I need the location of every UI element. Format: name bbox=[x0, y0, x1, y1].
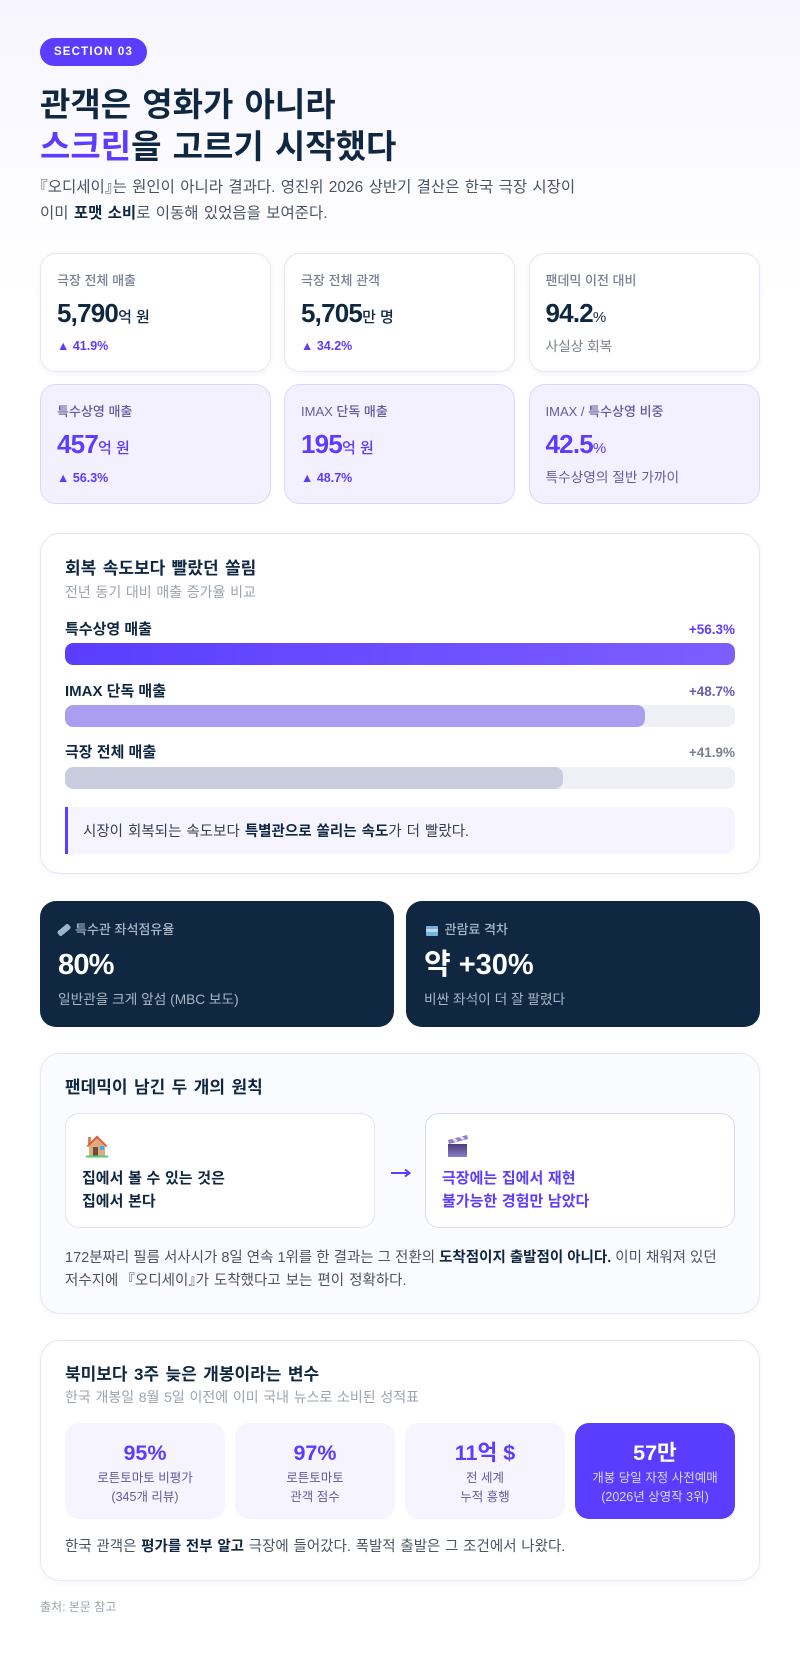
panel heading: 팬데믹이 남긴 두 개의 원칙 bbox=[65, 1078, 263, 1097]
stat card: total audience: ▲ 34.2% bbox=[301, 339, 352, 353]
principle box: home bbox=[65, 1113, 375, 1228]
tile: presales bbox=[575, 1423, 735, 1519]
tile: audience score: 로튼토마토 bbox=[286, 1471, 344, 1485]
panel subheading: 전년 동기 대비 매출 증가율 비교 bbox=[65, 584, 256, 600]
source note: 출처: 본문 참고 bbox=[40, 1600, 116, 1614]
principle text: 불가능한 경험만 남았다 bbox=[442, 1193, 589, 1210]
paragraph: 저수지에 『오디세이』가 도착했다고 보는 편이 정확하다. bbox=[65, 1273, 407, 1289]
panel heading: 회복 속도보다 빨랐던 쏠림 bbox=[65, 559, 256, 578]
stat card: total audience: 극장 전체 관객 bbox=[301, 273, 380, 288]
tile: critics score: 로튼토마토 비평가 bbox=[97, 1471, 193, 1485]
subtitle: 『오디세이』는 원인이 아니라 결과다. 영진위 2026 상반기 결산은 한국 극장 시장이 bbox=[32, 179, 575, 196]
paragraph: 172분짜리 필름 서사시가 8일 연속 1위를 한 결과는 그 전환의 도착점이지 출발점이 아니다. 이미 채워져 있던 bbox=[65, 1250, 717, 1266]
value: 80% bbox=[58, 949, 114, 981]
principle box: theater bbox=[425, 1113, 735, 1228]
tile: presales: (2026년 상영작 3위) bbox=[601, 1490, 709, 1504]
stat card: special format revenue: 457억 원 bbox=[57, 429, 130, 459]
title: 관객은 영화가 아니라 bbox=[40, 86, 336, 123]
tile: critics score: 95% bbox=[123, 1441, 167, 1465]
icon: house bbox=[86, 1136, 108, 1158]
stat card: IMAX share: 42.5% bbox=[546, 429, 606, 459]
bar label: total: 극장 전체 매출 bbox=[65, 744, 156, 761]
stat card: special format revenue bbox=[40, 384, 271, 504]
subtitle: 이미 포맷 소비로 이동해 있었음을 보여준다. bbox=[40, 205, 328, 222]
tile: presales: 개봉 당일 자정 사전예매 bbox=[592, 1471, 718, 1485]
stat card: special format revenue: ▲ 56.3% bbox=[57, 471, 108, 485]
stat card: total revenue: ▲ 41.9% bbox=[57, 339, 108, 353]
dark card: ticket price gap bbox=[406, 901, 760, 1027]
note: 일반관을 크게 앞섬 (MBC 보도) bbox=[58, 992, 239, 1007]
stat card: IMAX revenue bbox=[284, 384, 515, 504]
panel heading: 북미보다 3주 늦은 개봉이라는 변수 bbox=[65, 1365, 319, 1384]
tile: worldwide gross: 전 세계 bbox=[466, 1471, 504, 1485]
stat card: total revenue: 5,790억 원 bbox=[57, 298, 150, 328]
icon: credit card bbox=[426, 926, 438, 936]
subtitle bbox=[32, 179, 575, 222]
badge: section 03 bbox=[40, 38, 147, 66]
stat card: IMAX revenue: ▲ 48.7% bbox=[301, 471, 352, 485]
stat card: IMAX share: IMAX / 특수상영 비중 bbox=[546, 404, 664, 419]
value: 약 +30% bbox=[424, 949, 534, 981]
stat card: IMAX share bbox=[528, 384, 760, 504]
stat card: versus pre-pandemic: 팬데믹 이전 대비 bbox=[546, 273, 636, 288]
stat card: IMAX revenue: 195억 원 bbox=[301, 429, 374, 459]
stat card: total revenue: 극장 전체 매출 bbox=[57, 273, 136, 288]
icon: clapperboard bbox=[448, 1135, 468, 1157]
stat card: special format revenue: 특수상영 매출 bbox=[57, 404, 132, 419]
note: 비싼 좌석이 더 잘 팔렸다 bbox=[424, 992, 565, 1007]
tile: critics score bbox=[65, 1423, 225, 1519]
bar value: special format: +56.3% bbox=[689, 622, 735, 637]
principle text bbox=[442, 1170, 589, 1210]
stat card: total revenue bbox=[40, 253, 271, 372]
panel: delayed release bbox=[40, 1340, 760, 1581]
callout: 시장이 회복되는 속도보다 특별관으로 쏠리는 속도가 더 빨랐다. bbox=[83, 824, 469, 840]
title: 스크린을 고르기 시작했다 bbox=[40, 128, 396, 165]
title bbox=[40, 86, 396, 165]
dark card: seat occupancy bbox=[40, 901, 394, 1027]
bar label: special format: 특수상영 매출 bbox=[65, 621, 152, 638]
panel subheading: 한국 개봉일 8월 5일 이전에 이미 국내 뉴스로 소비된 성적표 bbox=[65, 1389, 419, 1405]
tile: worldwide gross: 11억 $ bbox=[455, 1441, 515, 1465]
icon: ticket bbox=[57, 924, 71, 936]
stat card: versus pre-pandemic bbox=[528, 253, 760, 372]
bar: total bbox=[65, 767, 735, 789]
principle text bbox=[82, 1170, 225, 1210]
stat card: versus pre-pandemic: 94.2% bbox=[546, 298, 606, 328]
stat card: IMAX revenue: IMAX 단독 매출 bbox=[301, 404, 388, 419]
conclusion text: 한국 관객은 평가를 전부 알고 극장에 들어갔다. 폭발적 출발은 그 조건에서 나왔다. bbox=[65, 1539, 565, 1555]
callout bbox=[65, 807, 735, 854]
principle text: 극장에는 집에서 재현 bbox=[442, 1170, 576, 1187]
bar: special format bbox=[65, 643, 735, 665]
bar: IMAX bbox=[65, 705, 735, 727]
bar label: IMAX: IMAX 단독 매출 bbox=[65, 683, 166, 700]
principle text: 집에서 볼 수 있는 것은 bbox=[82, 1170, 225, 1187]
tile: audience score: 관객 점수 bbox=[290, 1490, 340, 1504]
bar value: total: +41.9% bbox=[689, 745, 735, 760]
stat card: total audience: 5,705만 명 bbox=[301, 298, 394, 328]
principle text: 집에서 본다 bbox=[82, 1193, 156, 1210]
tile: worldwide gross: 누적 흥행 bbox=[460, 1490, 510, 1504]
stat card: total audience bbox=[284, 253, 515, 372]
badge: section 03: SECTION 03 bbox=[54, 46, 133, 58]
stat card: versus pre-pandemic: 사실상 회복 bbox=[546, 339, 612, 354]
tile: audience score: 97% bbox=[293, 1441, 337, 1465]
stat card: IMAX share: 특수상영의 절반 가까이 bbox=[546, 470, 679, 485]
panel: two principles bbox=[40, 1053, 760, 1314]
tile: presales: 57만 bbox=[633, 1441, 677, 1465]
bar value: IMAX: +48.7% bbox=[689, 684, 735, 699]
arrow bbox=[391, 1168, 411, 1178]
label: 특수관 좌석점유율 bbox=[75, 922, 174, 937]
panel: bar chart comparison bbox=[40, 533, 760, 874]
tile: worldwide gross bbox=[405, 1423, 565, 1519]
label: 관람료 격차 bbox=[444, 922, 508, 937]
tile: critics score: (345개 리뷰) bbox=[111, 1490, 179, 1504]
paragraph bbox=[65, 1249, 717, 1289]
tile: audience score bbox=[235, 1423, 395, 1519]
